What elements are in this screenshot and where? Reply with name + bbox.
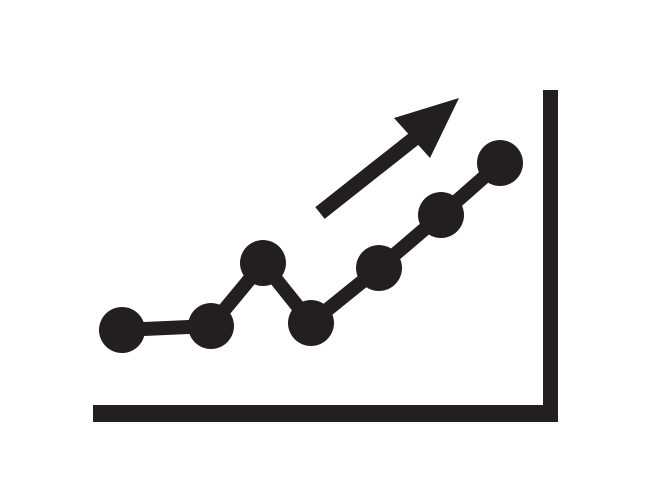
line series [99, 140, 523, 353]
axes [93, 90, 558, 422]
arrow: upward trend [320, 98, 459, 213]
